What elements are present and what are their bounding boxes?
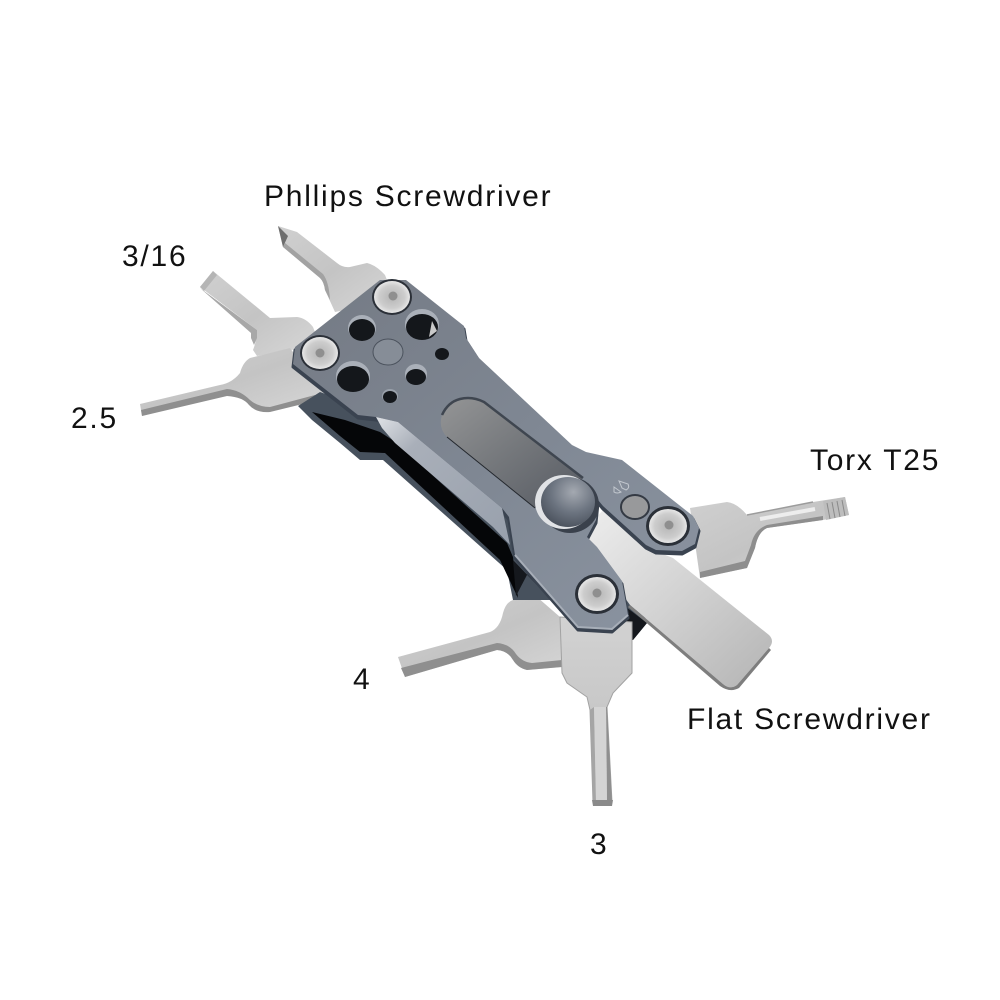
plug: lower (621, 495, 649, 519)
label: 4: 4 (353, 663, 371, 696)
tool: Torx T25 (690, 497, 849, 578)
button (535, 475, 599, 533)
label: Phillips Screwdriver: Phllips Screwdriver (264, 180, 552, 213)
logo mark (614, 481, 629, 493)
slot (441, 398, 583, 508)
long bevel face (376, 417, 510, 545)
screws (300, 279, 690, 614)
tool: 3/16 hex key (200, 271, 320, 356)
label: 3: 3 (590, 828, 608, 861)
plate shadow rim (293, 283, 699, 632)
label: 2.5: 2.5 (71, 402, 118, 435)
plug: upper (373, 339, 403, 365)
tool: 3 hex key (560, 617, 632, 806)
label: Flat Screwdriver: Flat Screwdriver (687, 703, 932, 736)
screw: right (646, 506, 690, 546)
screw: top (372, 279, 412, 315)
tool: 4 hex key (398, 597, 575, 677)
mounting holes (336, 309, 449, 403)
silver pivot pin (306, 399, 332, 417)
label: 3/16: 3/16 (122, 240, 187, 273)
lower arm edge highlight (515, 555, 628, 629)
tool: Phillips screwdriver (278, 226, 395, 312)
rear body (298, 392, 647, 640)
plate face (293, 280, 699, 629)
screw: left (300, 335, 340, 371)
tool: flat screwdriver blade (580, 510, 772, 690)
label: Torx T25: Torx T25 (810, 444, 940, 477)
screw: bottom (575, 574, 619, 614)
tool: 2.5 hex key (140, 348, 325, 416)
